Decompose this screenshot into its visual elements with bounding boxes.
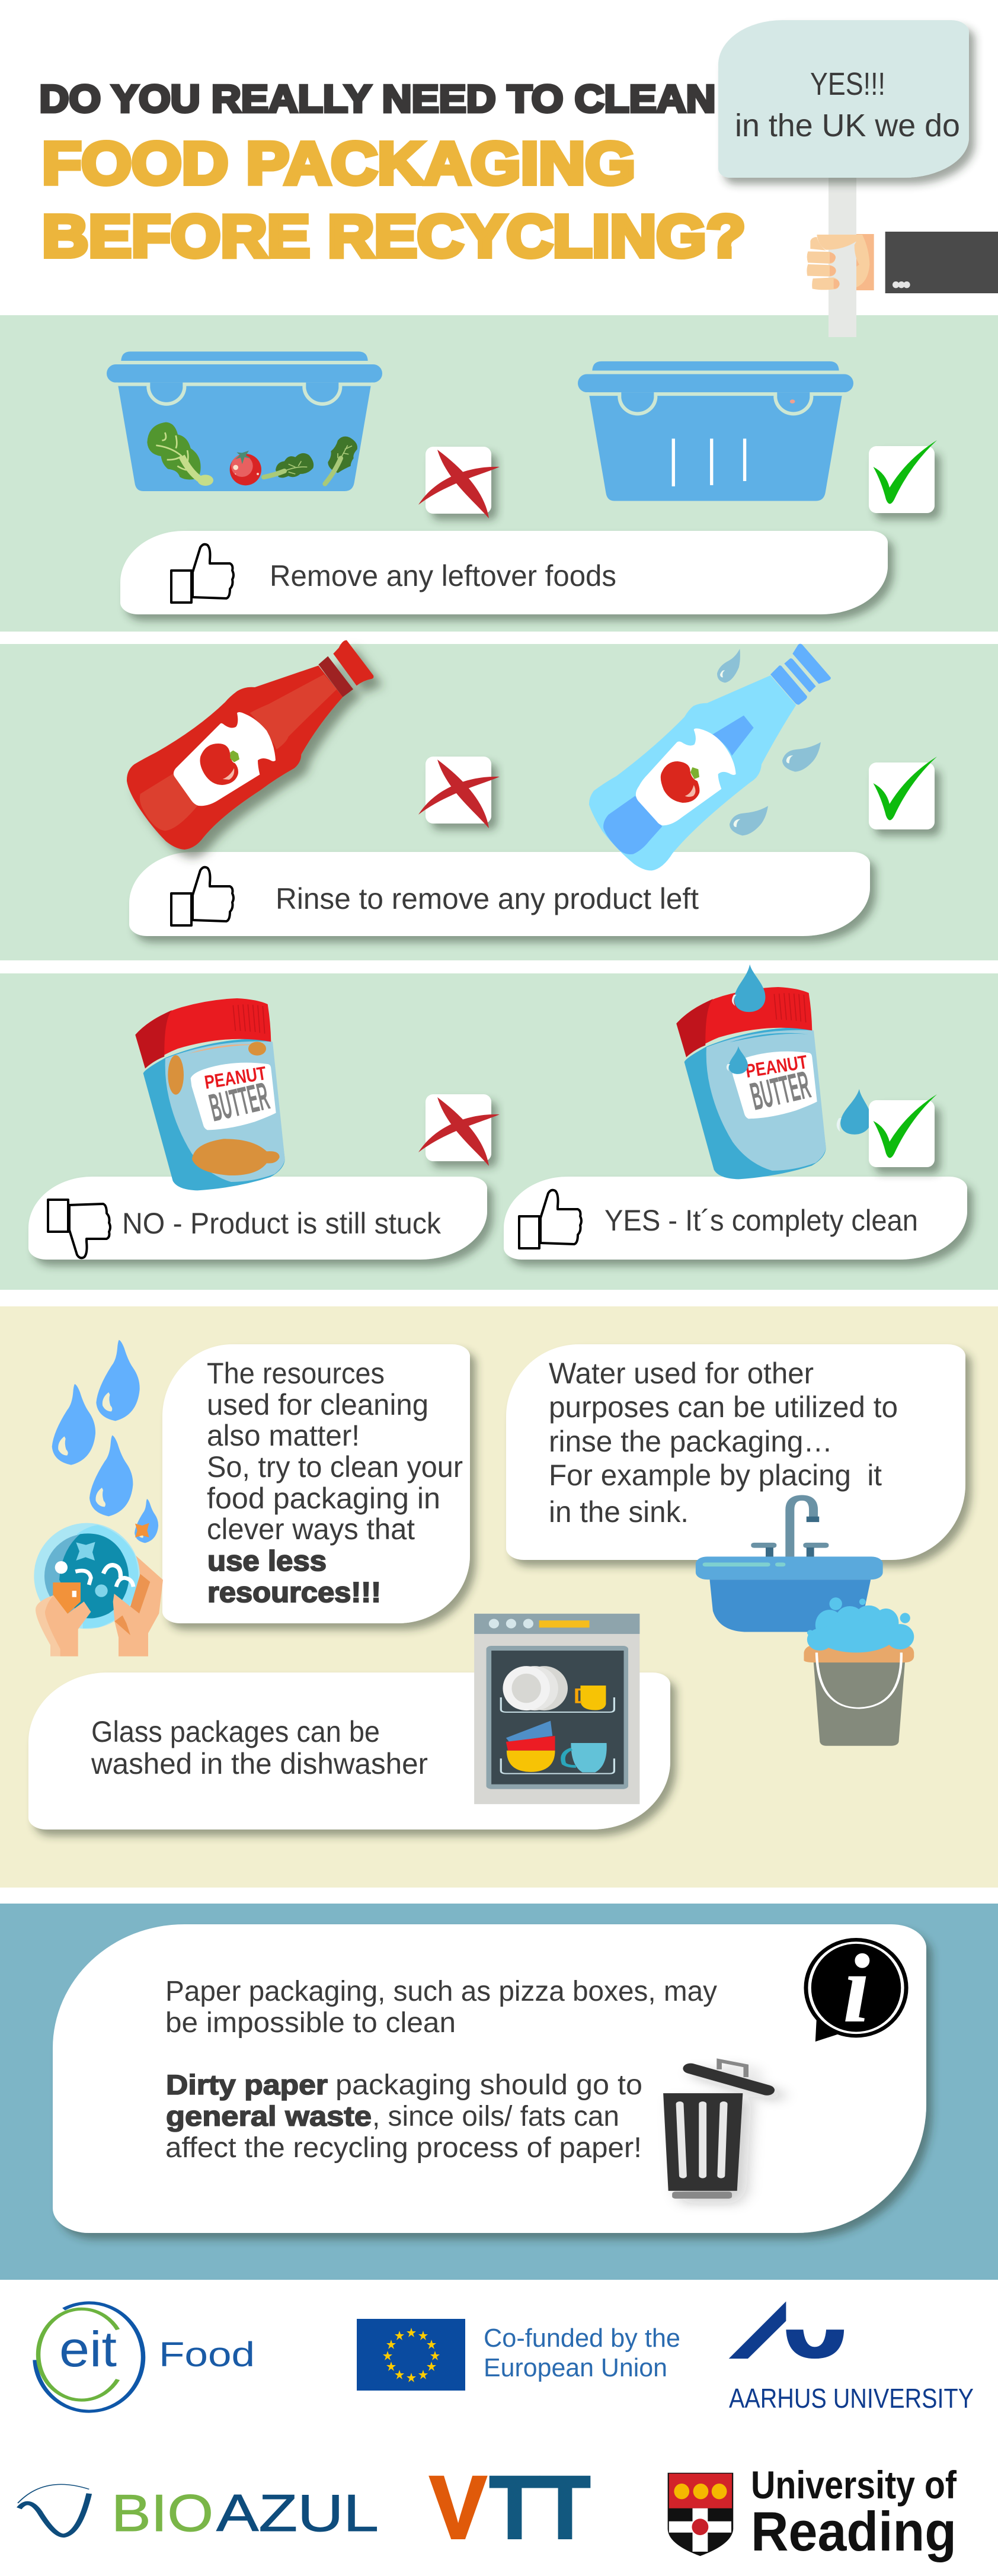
icon: correct tick — [869, 1094, 937, 1167]
callout: paper packaging text: Dirty paper — [166, 2069, 328, 2100]
callout: glass packages text: washed in the dishwasher — [91, 1747, 428, 1780]
callout: paper packaging text: general waste — [166, 2100, 372, 2132]
callout: resources text: also matter! — [207, 1419, 360, 1452]
logo: University of Reading: Reading — [751, 2500, 957, 2562]
logo: EIT Food: eit — [59, 2321, 117, 2377]
logo: University of Reading — [668, 2463, 957, 2562]
logo: VTT — [430, 2458, 590, 2557]
callout: completely clean — [504, 1177, 967, 1260]
callout: paper packaging text: be impossible to clean — [165, 2007, 456, 2039]
icon: information bubble: i — [843, 1934, 870, 2043]
callout: glass packages text — [28, 1673, 670, 1830]
logo: EU co-funded: Co-funded by the — [484, 2324, 680, 2353]
icon: clean peanut butter jar with drops: PEANUT — [744, 1051, 809, 1082]
callout: remove any leftover foods — [120, 531, 888, 614]
panel: peanut butter jars: BUTTER — [206, 1074, 273, 1130]
callout: paper packaging text: Paper packaging, such as pizza boxes, may — [165, 1976, 717, 2007]
icon: box with leftover food — [107, 351, 382, 491]
icon: information bubble — [804, 1934, 909, 2043]
callout: resources text: food packaging in — [207, 1482, 440, 1515]
logo: EIT Food — [35, 2303, 255, 2411]
callout: resources text: The resources — [207, 1357, 385, 1390]
icon: dirty ketchup bottle — [127, 640, 373, 850]
panel: paper packaging — [0, 1904, 998, 2280]
callout: reuse water text: Water used for other — [549, 1357, 814, 1390]
icon: correct tick — [869, 440, 937, 513]
icon: trash can — [663, 2061, 767, 2199]
callout: reuse water text — [506, 1344, 965, 1560]
callout: paper packaging text: affect the recycling process of paper! — [165, 2132, 642, 2164]
logo: VTT: TT — [490, 2458, 590, 2557]
sign held by hand: in the UK we do — [735, 108, 960, 143]
callout: paper packaging text — [53, 1924, 926, 2233]
icon: wrong cross — [418, 447, 500, 518]
icon: bucket with foam — [804, 1597, 914, 1746]
icon: correct tick — [869, 757, 937, 829]
callout: resources text: use less — [207, 1546, 327, 1577]
icon: dirty peanut butter jar: PEANUT — [203, 1062, 268, 1093]
logo: EU co-funded: European Union — [484, 2353, 667, 2382]
icon: water drops — [52, 1340, 158, 1543]
callout: reuse water text: purposes can be utilized to — [549, 1390, 898, 1424]
icon: clean box — [578, 361, 853, 501]
logo: Aarhus University — [729, 2302, 974, 2414]
title — [39, 77, 746, 270]
callout: resources text — [162, 1344, 470, 1623]
callout: resources text: So, try to clean your — [207, 1450, 463, 1484]
icon: hand — [807, 232, 998, 293]
callout: paper packaging text: , since oils/ fats can — [372, 2101, 619, 2132]
logo: VTT: V — [430, 2458, 487, 2557]
callout: reuse water text: rinse the packaging… — [549, 1425, 833, 1458]
panel: remove leftover foods — [0, 315, 998, 632]
callout: rinse to remove any product left — [129, 852, 870, 936]
icon: hands washing a plate — [34, 1523, 163, 1657]
callout: resources text: clever ways that — [207, 1513, 415, 1546]
logo: Bioazul: BIO — [111, 2484, 213, 2542]
callout: resources text: resources!!! — [207, 1577, 381, 1609]
icon: wrong cross — [418, 1094, 500, 1166]
logo: EIT Food: Food — [159, 2335, 255, 2374]
title: FOOD PACKAGING — [42, 130, 635, 197]
logo: Bioazul — [18, 2484, 379, 2542]
callout: product still stuck — [28, 1177, 487, 1260]
icon: dishwasher — [474, 1614, 639, 1804]
callout: reuse water text: in the sink. — [549, 1495, 689, 1529]
sign held by hand — [718, 20, 998, 337]
panel: peanut butter jars — [0, 965, 998, 1290]
callout: product still stuck: NO - Product is still stuck — [122, 1207, 442, 1240]
icon: dirty peanut butter jar — [135, 998, 285, 1190]
panel: rinse — [0, 640, 998, 960]
logo: University of Reading: University of — [751, 2463, 957, 2507]
callout: resources text: used for cleaning — [207, 1388, 428, 1421]
title: BEFORE RECYCLING? — [42, 203, 746, 270]
icon: rinsed bottle with water drops — [589, 644, 831, 870]
logo: EU co-funded — [357, 2319, 680, 2391]
icon: sink with tap — [696, 1498, 883, 1632]
icon: clean peanut butter jar with drops — [676, 965, 874, 1179]
callout: completely clean: YES - It´s complety clean — [604, 1204, 918, 1237]
sign held by hand: YES!!! — [810, 66, 885, 102]
callout: paper packaging text: packaging should go to — [335, 2069, 642, 2101]
callout: reuse water text: For example by placing it — [549, 1459, 882, 1492]
icon: wrong cross — [418, 757, 500, 828]
callout: remove any leftover foods: Remove any leftover foods — [270, 559, 616, 592]
icon: clean peanut butter jar with drops: BUTTER — [747, 1062, 814, 1119]
logo: Bioazul: AZUL — [216, 2484, 379, 2542]
panel: resources matter — [0, 1306, 998, 1888]
callout: glass packages text: Glass packages can be — [91, 1715, 380, 1748]
callout: rinse to remove any product left: Rinse to remove any product left — [276, 882, 699, 915]
title: DO YOU REALLY NEED TO CLEAN — [39, 77, 716, 120]
